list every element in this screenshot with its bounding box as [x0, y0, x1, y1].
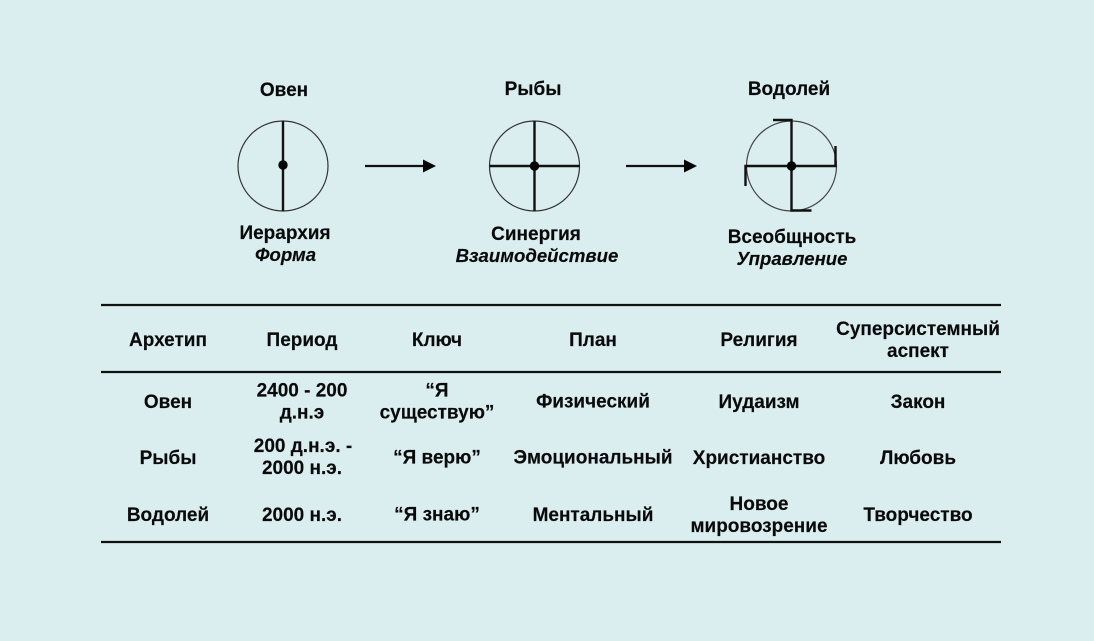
diagram: Овен: [238, 80, 331, 265]
heading: Овен: Овен: [260, 80, 308, 101]
table row: Водолей: “Я знаю”: [394, 504, 480, 526]
diagram: Рыбы: [456, 79, 618, 266]
table header row: План: [569, 330, 617, 351]
table row: Рыбы: [140, 436, 956, 479]
table row: Водолей: Ментальный: [533, 505, 653, 526]
table header row: Период: [267, 330, 337, 351]
arrow: Рыбы to Водолей: [626, 160, 697, 172]
table row: Рыбы: Эмоциональный: [513, 448, 673, 468]
table row: Рыбы: 200 д.н.э. -: [254, 436, 352, 457]
table row: Водолей: 2000 н.э.: [262, 505, 342, 526]
table row: Рыбы: “Я верю”: [393, 448, 481, 468]
table row: Овен: Овен: [144, 392, 192, 413]
table row: Овен: Иудаизм: [718, 392, 800, 413]
label: Иерархия Форма: [239, 223, 331, 265]
table rules: [101, 305, 1001, 542]
table row: Водолей: мировозрение: [690, 516, 828, 537]
table row: Водолей: Новое: [730, 494, 788, 515]
heading: Водолей: Водолей: [748, 79, 830, 100]
label: Иерархия Форма: Иерархия: [239, 223, 331, 244]
table row: Овен: существую”: [380, 402, 494, 424]
label: Всеобщность Управление: Всеобщность: [728, 227, 856, 248]
label: Синергия Взаимодействие: [456, 224, 618, 266]
table header row: Религия: [720, 330, 798, 351]
table header row: Ключ: [412, 330, 462, 351]
table row: Водолей: Водолей: [127, 505, 209, 526]
table row: Рыбы: Христианство: [693, 448, 825, 469]
diagram: Водолей: [728, 79, 856, 269]
table header row: Архетип: [129, 330, 207, 351]
table header row: [129, 319, 1000, 362]
label: Иерархия Форма: Форма: [255, 244, 316, 265]
table row: Овен: д.н.э: [280, 402, 324, 424]
label: Всеобщность Управление: Управление: [736, 248, 848, 269]
table row: Рыбы: Рыбы: [140, 448, 196, 469]
table row: Рыбы: 2000 н.э.: [262, 458, 342, 479]
table header row: Суперсистемный: [836, 319, 1000, 340]
heading: Рыбы: Рыбы: [505, 79, 561, 100]
arrow: Овен to Рыбы: [365, 160, 436, 172]
icon: circle with vertical line: [238, 121, 328, 211]
table row: Рыбы: Любовь: [880, 448, 956, 469]
label: Синергия Взаимодействие: Синергия: [491, 224, 581, 245]
table row: Водолей: [127, 494, 973, 537]
table row: Овен: Закон: [891, 392, 945, 413]
table row: Овен: 2400 - 200: [257, 380, 347, 402]
label: Всеобщность Управление: [728, 227, 856, 269]
table header row: аспект: [887, 341, 949, 362]
table row: Водолей: Творчество: [863, 505, 973, 526]
label: Синергия Взаимодействие: Взаимодействие: [456, 245, 618, 266]
icon: circle with cross: [490, 121, 580, 211]
table: [101, 305, 1001, 542]
table row: Овен: [144, 380, 945, 424]
icon: circle with rotating cross: [746, 120, 836, 211]
table row: Овен: “Я: [425, 380, 449, 402]
table row: Овен: Физический: [536, 392, 650, 412]
